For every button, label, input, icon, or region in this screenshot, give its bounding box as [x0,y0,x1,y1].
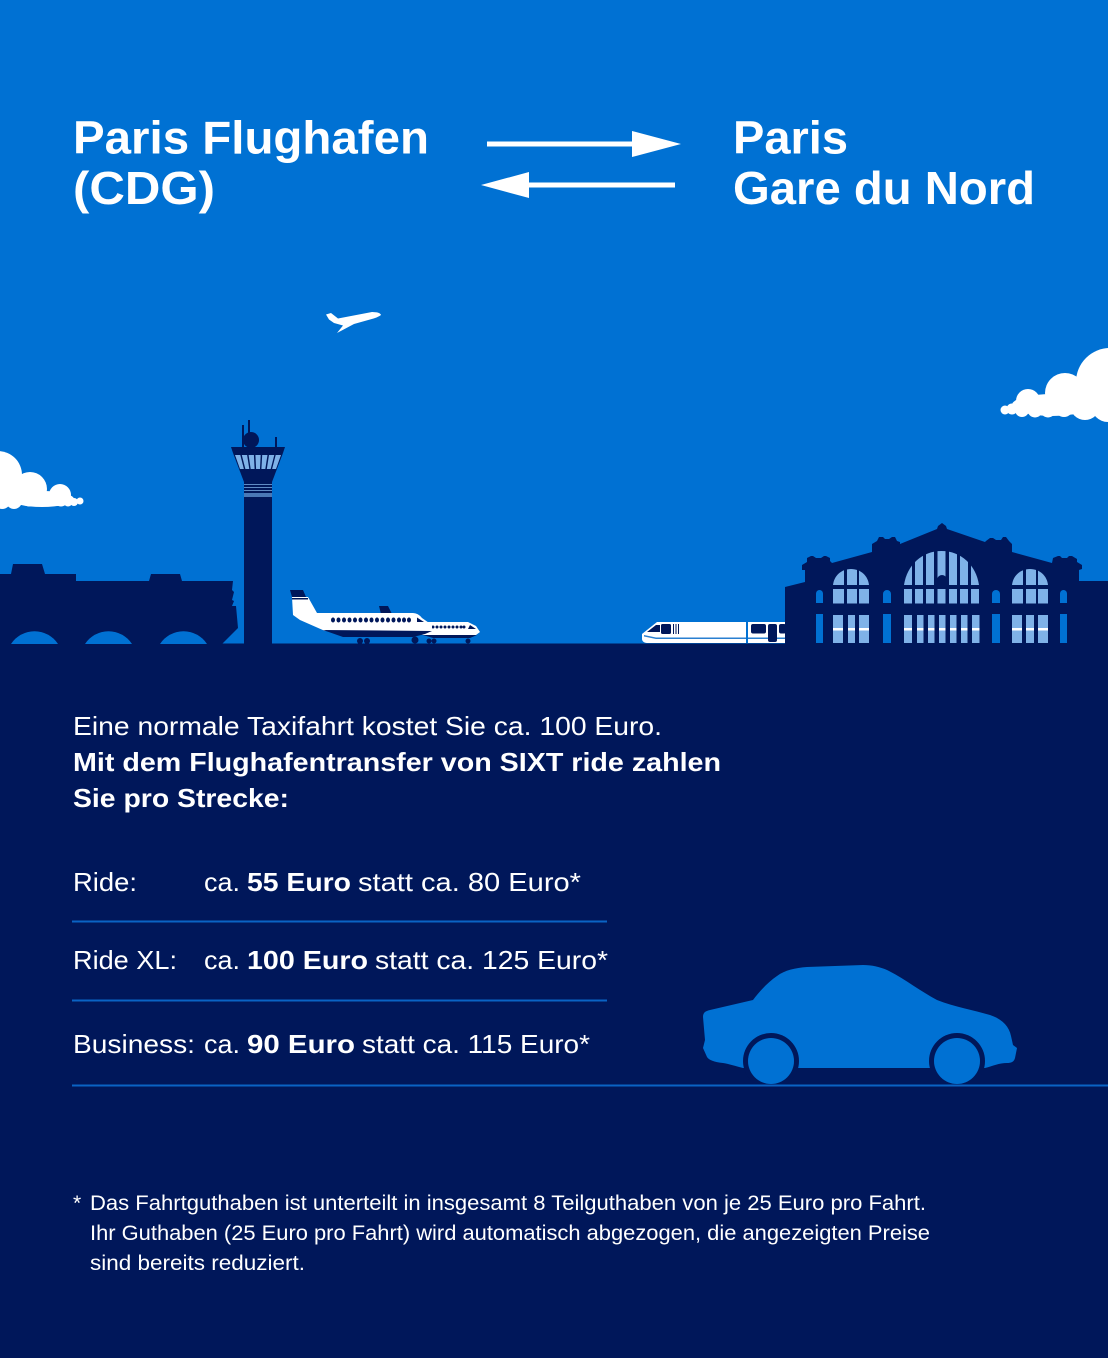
station silhouette [785,523,1108,644]
footnote: * [73,1192,81,1215]
price row: Business: statt ca. 115 Euro* [362,1029,590,1059]
divider [72,1000,607,1002]
title: origin: (CDG) [73,162,215,214]
train [642,622,786,643]
white light bands [833,628,1048,630]
price row: Ride XL: Ride XL: [73,945,177,975]
icon: cloud right [1000,348,1108,422]
icon: cloud left [0,451,84,509]
tower windows [235,455,281,469]
footnote [73,1192,930,1275]
small airplane [379,606,480,644]
central arched window [904,551,980,643]
price row: Ride: statt ca. 80 Euro* [358,867,581,897]
price row: Ride: 55 Euro [247,867,351,897]
right arched window [1012,569,1048,643]
price row: Business [73,1029,590,1059]
left arched window [833,569,869,643]
footnote: Das Fahrtguthaben ist unterteilt in insgesamt 8 Teilguthaben von je 25 Euro pro Fahrt. [90,1192,926,1215]
footnote: sind bereits reduziert. [90,1252,305,1275]
price row: Ride XL [73,945,608,975]
intro text: Mit dem Flughafentransfer von SIXT ride zahlen [73,747,721,777]
icon: car [703,965,1017,1089]
title: destination: Paris [733,112,848,164]
price row: Ride XL: 100 Euro [247,945,368,975]
terminal arches [11,631,207,644]
price row: Business: Business: [73,1029,195,1059]
control tower [231,420,285,644]
title: destination: Gare du Nord [733,162,1035,214]
airplanes on the ground [290,590,480,644]
footnote: Ihr Guthaben (25 Euro pro Fahrt) wird automatisch abgezogen, die angezeigten Preise [90,1222,930,1245]
road line [72,1084,1108,1086]
intro text: Eine normale Taxifahrt kostet Sie ca. 100 Euro. [73,711,662,741]
price row: Business: ca. [204,1029,240,1059]
price row: Business: 90 Euro [247,1029,355,1059]
icon: flying airplane [326,312,381,333]
narrow blue windows [816,590,1067,643]
price row: Ride: Ride: [73,867,137,897]
large airplane [290,590,432,644]
arrow: return [481,172,675,198]
divider [72,920,607,922]
airport terminal silhouette [0,564,238,644]
price row: Ride XL: statt ca. 125 Euro* [375,945,608,975]
arrow: outbound [487,131,681,157]
sky background [0,0,1108,644]
price row: Ride: ca. [204,867,240,897]
price row: Ride [73,867,581,897]
intro text [73,711,721,813]
title: origin: Paris Flughafen [73,112,429,164]
dark lower panel [0,644,1108,1358]
price row: Ride XL: ca. [204,945,240,975]
Gare du Nord station [785,523,1108,644]
intro text: Sie pro Strecke: [73,783,289,813]
